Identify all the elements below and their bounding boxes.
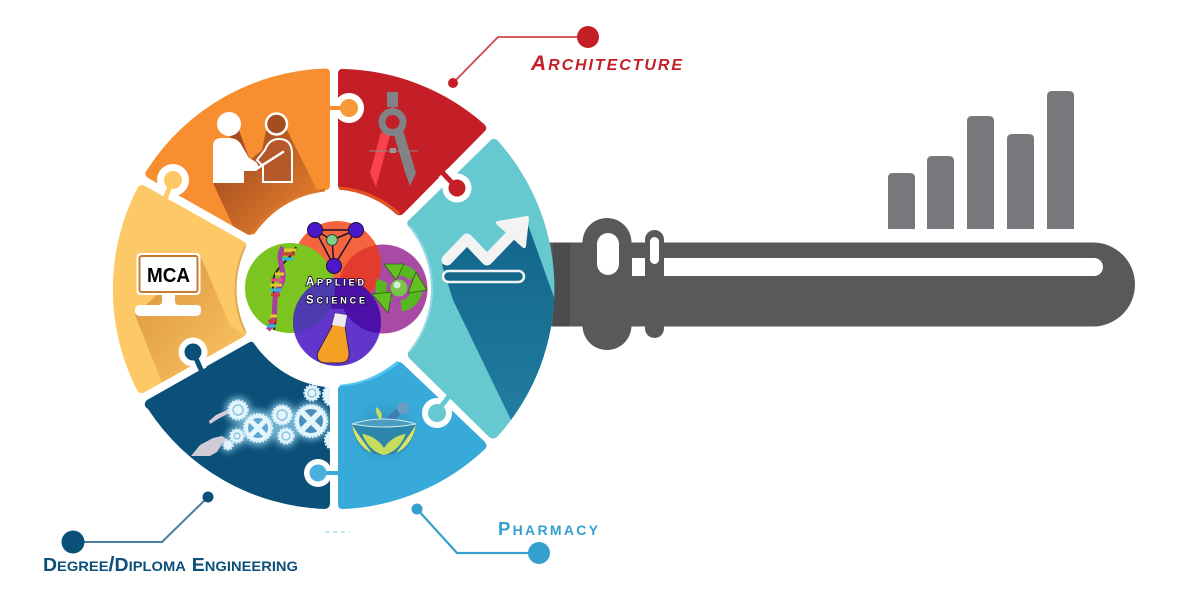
- icon: recycle globe: [372, 264, 427, 313]
- panel: architecture segment: [338, 69, 486, 215]
- callout: architecture: [448, 26, 683, 88]
- icon: gears and hand: [191, 384, 330, 456]
- icon: DNA helix: [267, 247, 296, 330]
- icon: molecule: [308, 222, 364, 274]
- bar chart icon: [888, 91, 1074, 229]
- panel: orange meeting segment: [145, 68, 330, 240]
- icon: drawing compass: [369, 92, 418, 187]
- puzzle knobs between segments: [157, 93, 472, 487]
- icon: MCA monitor: [135, 253, 201, 316]
- icon: two people shaking hands: [213, 112, 292, 183]
- callout: pharmacy: Pharmacy: [498, 517, 599, 540]
- text: Applied Science: Applied: [306, 274, 364, 288]
- callout: pharmacy: [412, 504, 599, 564]
- icon: flask: [317, 313, 349, 363]
- callout: architecture: Architecture: [530, 49, 683, 75]
- panel: MCA segment: [113, 185, 250, 393]
- callout: degree/diploma engineering: Degree/Diploma Engineering: [43, 553, 298, 576]
- panel: pharmacy segment: [338, 362, 486, 509]
- text: Applied Science: [306, 274, 365, 306]
- icon: mortar and pestle: [352, 402, 416, 455]
- panel: applied science centre circles: [245, 216, 428, 385]
- text: Applied Science: Science: [306, 292, 365, 306]
- icon: MCA monitor: MCA: [147, 265, 190, 287]
- panel: engineering segment: [145, 342, 347, 509]
- key handle: [545, 218, 1135, 350]
- callout: degree/diploma engineering: [43, 492, 298, 576]
- panel: teal growth segment: [407, 139, 555, 438]
